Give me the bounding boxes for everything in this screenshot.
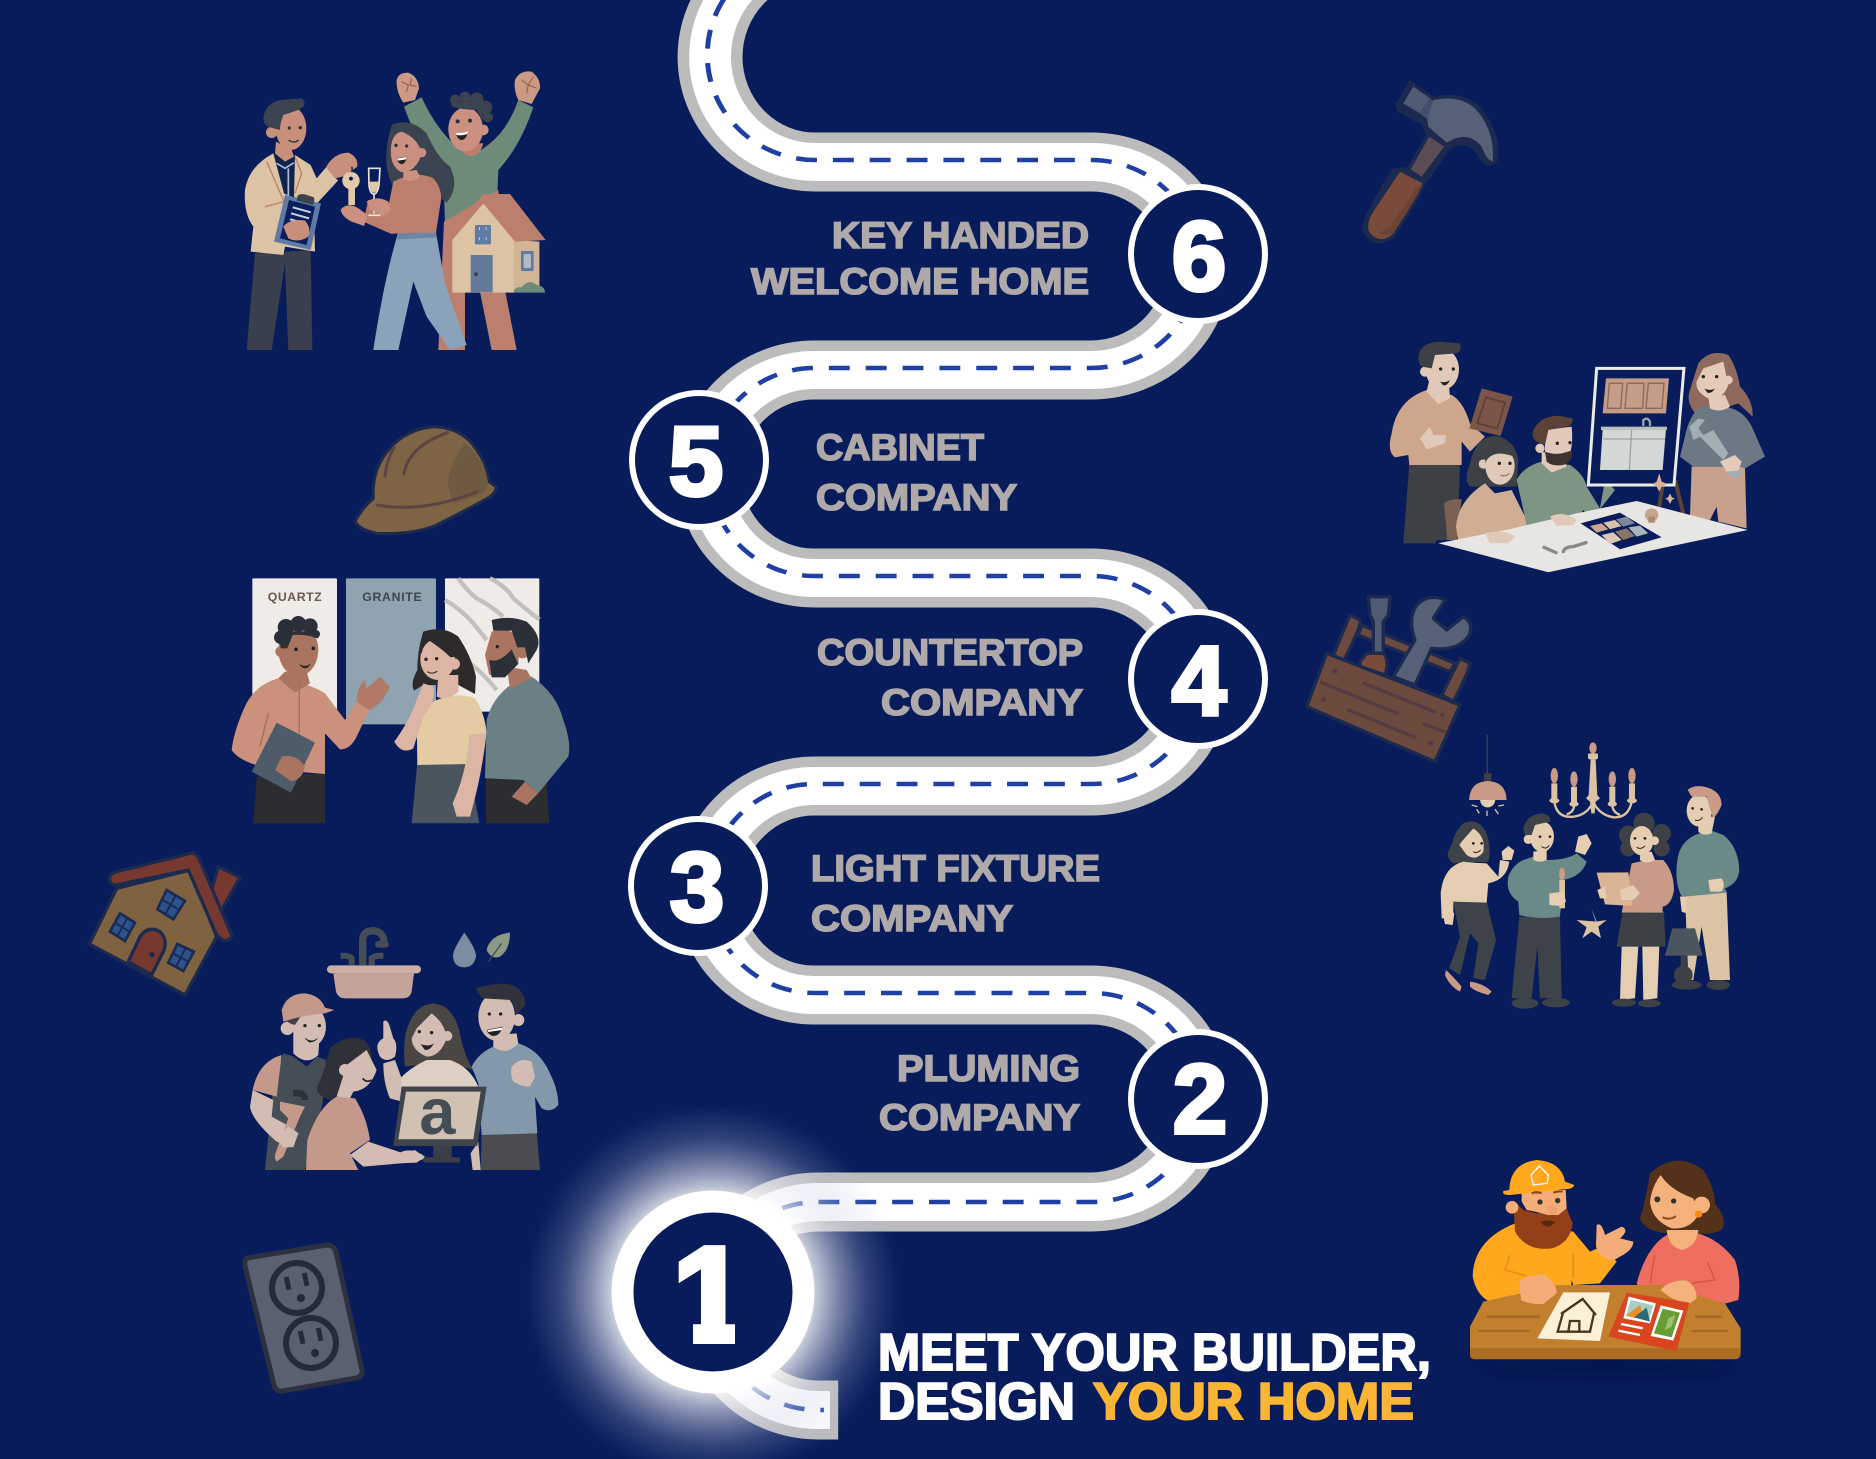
pendant lamp: [1469, 735, 1507, 816]
illustration: meet your builder: [1470, 1160, 1741, 1377]
label: light fixture company: [811, 848, 1100, 939]
icon: hard hat: [355, 427, 497, 534]
label: pluming company: COMPANY: [879, 1097, 1080, 1138]
granite panel: [346, 578, 436, 724]
illustration: key handover: [245, 71, 546, 350]
leaf: [487, 933, 510, 962]
marble panel: [445, 578, 539, 712]
step 3 marker: 3: [670, 832, 724, 942]
floor lamp: [1665, 928, 1703, 990]
label: cabinet company: [816, 427, 1017, 518]
label: cabinet company: CABINET: [816, 427, 984, 468]
label: pluming company: [879, 1048, 1080, 1138]
step 2 marker: [1131, 1032, 1265, 1166]
label: cabinet company: COMPANY: [816, 477, 1017, 518]
label: countertop company: COUNTERTOP: [817, 632, 1083, 673]
monitor: [393, 1075, 487, 1163]
label: pluming company: PLUMING: [897, 1048, 1080, 1089]
step 3 marker: [631, 819, 765, 953]
title: meet your builder, design your home: MEET YOUR BUILDER,: [878, 1324, 1431, 1382]
label: countertop company: COMPANY: [881, 682, 1083, 723]
icon: hammer: [1363, 82, 1497, 242]
glow behind step 1: [525, 1104, 901, 1459]
winding road: [707, 0, 1198, 1410]
label: light fixture company: LIGHT FIXTURE: [811, 848, 1100, 889]
step 4 marker: 4: [1172, 626, 1226, 736]
sink and faucet: [327, 931, 421, 998]
quartz panel: [252, 578, 337, 712]
title: meet your builder, design your home: YOUR HOME: [1093, 1373, 1414, 1431]
step 1 marker: [622, 1202, 804, 1382]
quartz panel: QUARTZ: [268, 590, 322, 604]
label: countertop company: [817, 632, 1083, 723]
water drop: [453, 933, 476, 967]
label: key handed, welcome home: [751, 215, 1089, 302]
granite panel: GRANITE: [362, 590, 422, 604]
raised fists: [397, 71, 540, 104]
title: meet your builder, design your home: DESIGN: [878, 1373, 1075, 1431]
step 6 marker: [1131, 187, 1265, 321]
icon: tilted house: [89, 853, 240, 995]
label: key handed, welcome home: KEY HANDED: [832, 215, 1089, 256]
illustration: plumbing discussion: [250, 931, 558, 1170]
icon: toolbox: [1307, 597, 1471, 762]
step 2 marker: 2: [1173, 1044, 1227, 1154]
step 1 marker: 1: [672, 1219, 748, 1370]
icon: wall outlet: [245, 1245, 362, 1391]
label: key handed, welcome home: WELCOME HOME: [751, 261, 1089, 302]
step 4 marker: [1131, 612, 1265, 746]
step 5 marker: 5: [669, 406, 723, 516]
chandelier: [1549, 742, 1637, 817]
illustration: light fixture selection: [1441, 735, 1739, 1009]
illustration: countertop selection: [232, 578, 569, 823]
title: meet your builder, design your home: [878, 1324, 1431, 1431]
monitor: a: [419, 1075, 456, 1148]
illustration: cabinet planning: [1390, 342, 1765, 572]
step 5 marker: [632, 393, 766, 527]
step 6 marker: 6: [1172, 201, 1226, 311]
label: light fixture company: COMPANY: [811, 898, 1013, 939]
